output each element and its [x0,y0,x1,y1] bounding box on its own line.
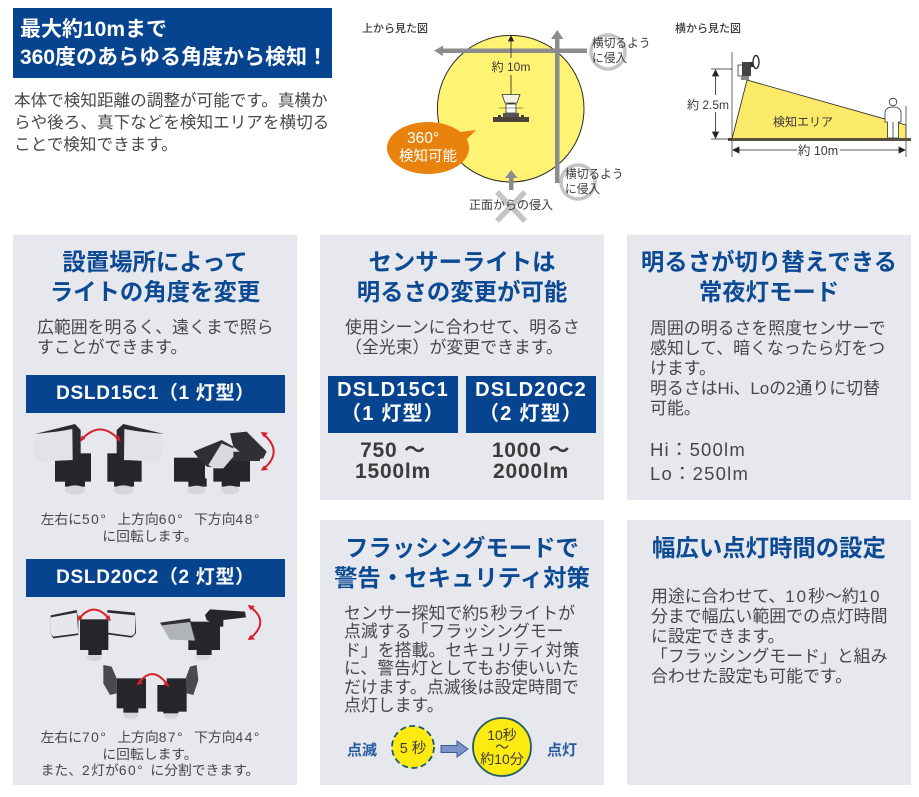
label: crossing lower: 横切るよう [565,167,623,181]
heading: brightness change: センサーライトは [368,249,556,275]
text: flashing description: だけます。点滅後は設定時間で [344,678,579,697]
text: flashing description: に、警告灯としてもお使いいた [344,659,579,678]
band: model 1 [328,376,458,433]
circle: 5 seconds [392,726,434,768]
text: detection description: 本体で検知距離の調整が可能です。真横か [14,91,328,110]
callout: 360 degree detectable: 検知可能 [399,148,457,165]
text: night light description: 感知して、暗くなったら灯をつ [650,339,885,358]
caption: 2-lamp angles: に回転します。 [102,746,198,762]
label: side view title: 横から見た図 [675,21,741,35]
label: crossing lower: に侵入 [565,182,600,196]
band: model 2: DSLD20C2 [475,379,587,401]
dimension arrow: radius [508,36,514,122]
label: flash: 点滅 [347,741,377,759]
label: height: 約 2.5m [687,97,729,112]
panel: light angle [13,235,297,785]
icon: person [885,98,901,138]
text: flashing description: ド」を搭載。セキュリティ対策 [344,641,579,660]
photos: 1-lamp model [35,424,275,494]
heading: lighting time: 幅広い点灯時間の設定 [652,535,886,561]
panel: night light mode [627,235,911,500]
label: lit: 点灯 [547,741,577,759]
text: lighting time description: に設定できます。 [651,627,784,646]
text: lighting time description: 分まで幅広い範囲での点灯時間 [651,607,887,626]
arrow: vertical crossing [551,30,564,183]
ground [728,138,911,141]
arrow: to lit state [441,741,468,757]
band: model 1: （1 灯型） [341,402,445,424]
heading: brightness change [357,249,567,305]
text: night light description [650,319,885,418]
text: brightness description: （全光束）が変更できます。 [345,338,563,357]
ring: crossing marker upper [591,35,625,69]
circle: 10 seconds to 10 minutes: 10秒 [487,727,517,743]
heading: light angle: ライトの角度を変更 [50,279,260,305]
heading: night light mode: 常夜灯モード [699,279,839,305]
band: model 2: （2 灯型） [479,402,583,424]
band: model 2 [466,376,596,433]
band: DSLD15C1: DSLD15C1（1 灯型） [56,383,255,404]
arrow: swivel lower [137,674,169,687]
value: model 2 lumen [492,439,570,482]
text: brightness description [345,318,580,357]
detection circle [437,35,584,182]
arrow: tilt up-down [261,432,274,471]
panel: lighting time [627,520,911,785]
value: model 2 lumen: 2000lm [493,460,569,482]
caption: 2-lamp angles: 左右に70° 上方向87° 下方向44° [41,730,259,745]
text: lumen values: Lo：250lm [650,463,749,484]
label: detection area: 検知エリア [773,115,833,129]
caption: 2-lamp angles: また、2灯が60° に分割できます。 [41,763,259,778]
text: light angle description: すことができます。 [37,338,187,357]
dimension: height [711,69,732,139]
flow: flash to light [347,717,577,777]
photos: 2-lamp model [50,605,262,719]
text: lighting time description: 用途に合わせて、10秒～約10 [651,587,882,606]
caption: 1-lamp angles [41,512,259,544]
caption: 2-lamp angles [41,730,259,778]
label: frontal entry: 正面からの侵入 [469,197,553,212]
caption: 1-lamp angles: に回転します。 [102,528,198,544]
heading: brightness change: 明るさの変更が可能 [357,279,567,305]
heading: flashing mode: 警告・セキュリティ対策 [334,565,590,591]
band: DSLD20C2: DSLD20C2（2 灯型） [56,567,255,588]
icon: side light [738,56,759,80]
text: flashing description: 点滅する「フラッシングモー [344,622,564,641]
cross: frontal entry not detected [497,192,525,221]
label: crossing upper: に侵入 [592,51,627,65]
circle: 5 seconds: 5 秒 [400,740,427,757]
label: crossing upper: 横切るよう [592,36,650,50]
dimension: distance [733,147,905,153]
banner: detection headline: 最大約10mまで [20,18,167,41]
value: model 2 lumen: 1000 ～ [492,439,570,462]
band: DSLD15C1 [26,375,285,413]
text: lighting time description: 「フラッシングモード」と組み [651,647,887,666]
icon: light from above [493,94,529,122]
panel: flashing mode [320,520,604,785]
circle: 10 seconds to 10 minutes [473,718,531,776]
heading: light angle [50,249,260,305]
band: DSLD20C2 [26,559,285,597]
circle: 10 seconds to 10 minutes: 約10分 [480,751,524,767]
text: light angle description: 広範囲を明るく、遠くまで照ら [37,318,273,337]
band: model 1: DSLD15C1 [337,379,449,401]
circle: 10 seconds to 10 minutes: ～ [495,739,509,755]
label: radius: 約 10m [492,59,530,74]
arrow: tilt upper [248,605,260,640]
value: model 1 lumen: 750 ～ [360,439,426,462]
text: flashing description: センサー探知で約5秒ライトが [344,604,575,623]
caption: 1-lamp angles: 左右に50° 上方向60° 下方向48° [41,512,259,527]
callout: 360 degree detectable [387,122,476,174]
text: lighting time description [651,587,887,686]
text: night light description: けます。 [650,359,716,378]
text: light angle description [37,318,273,357]
detection area [732,80,906,139]
text: night light description: 可能。 [650,399,701,418]
banner: detection headline [13,8,332,78]
heading: night light mode [641,249,897,305]
heading: night light mode: 明るさが切り替えできる [641,249,897,275]
text: detection description: らや後ろ、真下などを検知エリアを横切る [14,113,329,132]
text: flashing description [344,604,579,715]
value: model 1 lumen [355,439,431,482]
heading: light angle: 設置場所によって [62,249,248,275]
wall lines [732,52,906,157]
heading: flashing mode [334,535,590,591]
label: top view title: 上から見た図 [362,22,428,35]
value: model 1 lumen: 1500lm [355,460,431,482]
banner: detection headline: 360度のあらゆる角度から検知！ [20,46,328,68]
text: detection description [14,91,329,154]
text: lumen values: Hi：500lm [650,439,746,460]
panel: brightness change [320,235,604,500]
heading: flashing mode: フラッシングモードで [345,535,579,561]
text: night light description: 周囲の明るさを照度センサーで [650,319,885,338]
text: brightness description: 使用シーンに合わせて、明るさ [345,318,580,337]
text: night light description: 明るさはHi、Loの2通りに切替 [650,379,880,398]
text: lumen values [650,439,749,484]
ring: crossing marker lower [561,165,595,199]
arrow: horizontal crossing [434,46,587,56]
text: lighting time description: 合わせた設定も可能です。 [651,667,852,686]
callout: 360 degree detectable: 360° [407,130,439,147]
arrow: swivel left-right [80,429,121,442]
text: detection description: ことで検知できます。 [14,135,178,154]
label: distance: 約 10m [798,143,838,158]
arrow: frontal entry [505,170,518,190]
text: flashing description: 点灯します。 [344,696,444,715]
arrow: swivel upper [77,610,111,621]
